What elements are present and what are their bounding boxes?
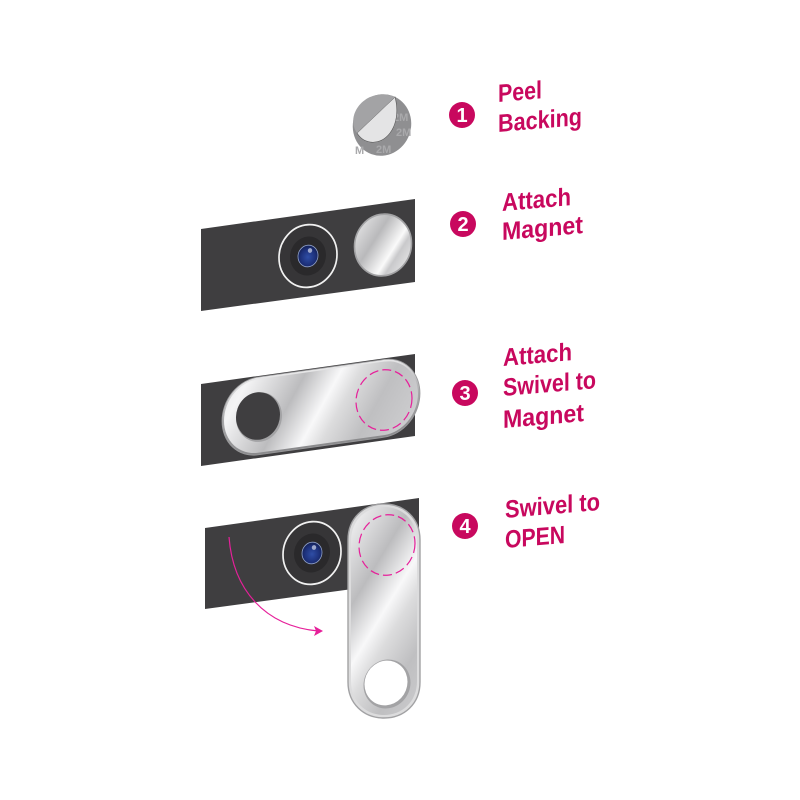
device panel [205, 498, 419, 609]
dashed magnet outline [356, 368, 412, 432]
swivel cover open [348, 504, 420, 718]
arrow [229, 537, 323, 636]
step 3 badge [452, 380, 478, 406]
step 4 illustration [205, 498, 420, 718]
step 4 label [505, 488, 600, 554]
device panel [201, 354, 415, 466]
peeled backing [357, 97, 397, 142]
step 2 label [502, 183, 584, 246]
hole [236, 391, 282, 443]
adhesive print: 2M [396, 127, 411, 139]
camera [283, 520, 341, 586]
step 2 badge [450, 211, 476, 237]
disc [344, 86, 420, 164]
step 4 label: Swivel to [505, 488, 600, 524]
camera [279, 223, 337, 289]
step 1 label: Peel [498, 76, 542, 108]
step 3 label: Attach [503, 338, 572, 372]
magnet disc [354, 213, 412, 277]
step 2 label: Magnet [502, 211, 584, 246]
hole [364, 658, 410, 710]
step 2 illustration [201, 199, 415, 311]
step 2 badge: 2 [457, 214, 469, 236]
step 4 badge [452, 513, 478, 539]
step 1 label: Backing [498, 103, 582, 138]
step 3 label: Swivel to [503, 366, 596, 402]
dashed magnet outline [359, 513, 415, 577]
adhesive print: M [355, 145, 364, 157]
swivel cover [222, 354, 420, 460]
step 1 illustration: peeled adhesive disc [344, 86, 420, 164]
adhesive print [355, 112, 411, 157]
step 1 badge: 1 [456, 105, 468, 127]
step 1 badge [449, 102, 475, 128]
step 3 label [503, 338, 596, 434]
step 2 label: Attach [502, 183, 571, 217]
exposed upper half [353, 94, 395, 133]
adhesive print: 2M [376, 144, 391, 156]
adhesive print: 2M [393, 112, 408, 124]
device panel [201, 199, 415, 311]
step 1 label [498, 76, 582, 138]
step 3 badge: 3 [459, 383, 471, 405]
step 3 illustration [201, 354, 420, 466]
step 3 label: Magnet [503, 399, 585, 434]
step 4 badge: 4 [459, 516, 471, 538]
step 4 label: OPEN [505, 521, 565, 554]
